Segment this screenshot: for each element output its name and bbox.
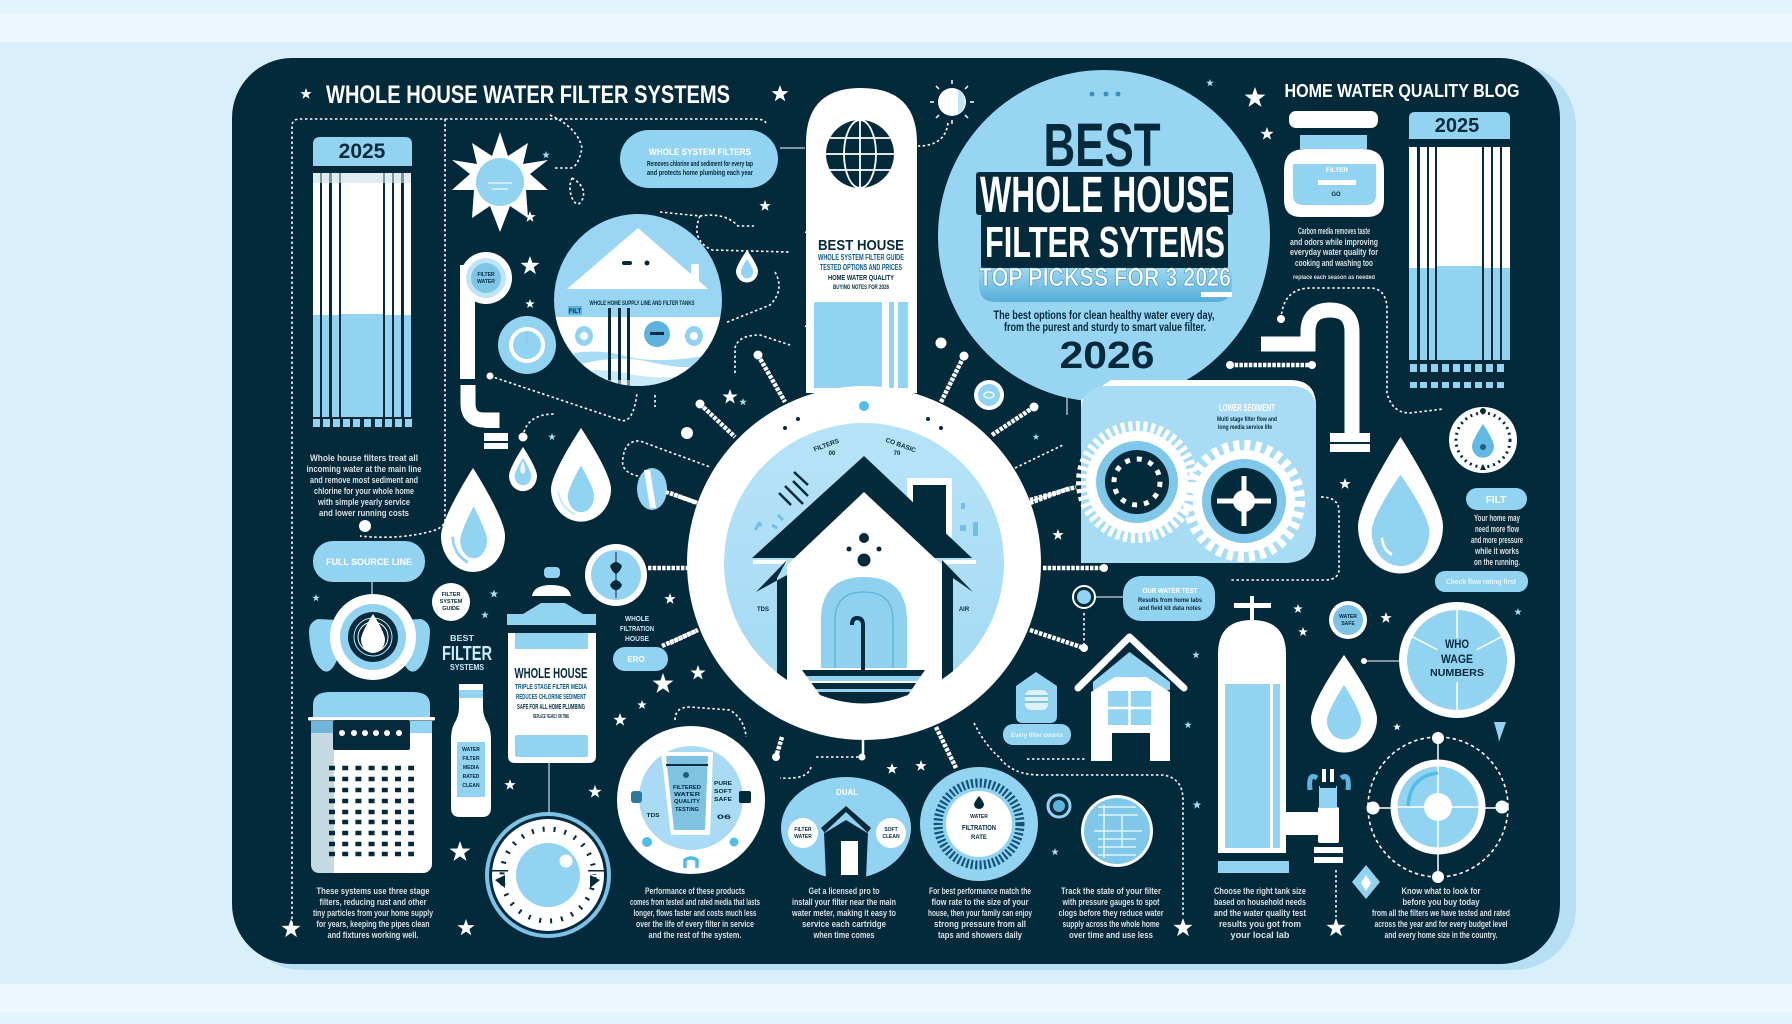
panel: main dark board <box>232 58 1576 970</box>
text block: tank: based on household needs <box>1214 897 1306 907</box>
text block: jar: everyday water quality for <box>1290 247 1378 257</box>
icon: small water drop <box>736 250 758 282</box>
title circle: WHOLE HOUSE <box>980 166 1230 223</box>
circle: ticked badge: RATE <box>971 835 987 841</box>
icon: small bottle: FILTER <box>462 756 480 762</box>
icon: faucet <box>1261 310 1370 452</box>
icon: small bottle <box>451 684 491 817</box>
pie badge: WAGE <box>1441 652 1473 666</box>
hub: central house emblem: TDS <box>757 607 769 613</box>
callout: water test pill: OUR WATER TEST <box>1142 586 1198 595</box>
text block: box <box>313 886 433 940</box>
text block: left cartridge: with simple yearly service <box>317 497 410 507</box>
title circle: from the purest and sturdy to smart value filter. <box>1004 320 1206 334</box>
dashed connectors <box>292 115 1443 929</box>
text block: target <box>1372 886 1510 940</box>
text block: left cartridge: and remove most sediment and <box>310 475 418 485</box>
text block: tank <box>1214 886 1306 940</box>
text block: target: and every home size in the country. <box>1384 930 1498 940</box>
callout: water test pill: Results from home labs <box>1138 598 1203 604</box>
side note right: need more flow <box>1475 524 1520 534</box>
icon: pipe with gauge <box>460 252 512 449</box>
label with pill beside hub: WHOLE <box>625 616 649 623</box>
text block: oval chart: Track the state of your filter <box>1061 886 1161 896</box>
icon: glass circle: QUALITY <box>674 799 700 805</box>
small badge near tank: WATER <box>1339 614 1357 620</box>
beaded spokes around hub <box>648 338 1316 768</box>
icon: glass circle: FILTERED <box>673 785 701 791</box>
icon: filter cartridge bottle: REDUCES CHLORINE SEDIMENT <box>516 694 586 701</box>
icon: glass circle: SAFE <box>714 797 732 803</box>
tall filter column with globe: BEST HOUSE <box>818 237 904 254</box>
icon: small house <box>1078 637 1184 761</box>
panel: gears: Multi stage filter flow and <box>1217 416 1277 423</box>
circle: small house: WATER <box>794 834 812 840</box>
text block: oval chart: clogs before they reduce water <box>1058 908 1164 918</box>
panel: gears <box>1081 380 1316 563</box>
text block: jar: Carbon media removes taste <box>1298 226 1370 236</box>
hub: central house emblem: AIR <box>959 607 970 613</box>
hub: central house emblem <box>687 386 1041 740</box>
text block: glass: comes from tested and rated media that lasts <box>630 897 760 907</box>
text block: target: across the year and for every budget level <box>1374 919 1508 929</box>
callout: water test pill <box>1073 576 1215 621</box>
text block: ticked badge: house, then your family can enjoy <box>928 908 1032 918</box>
icon: small bottle: WATER <box>462 747 480 753</box>
text block: box: and fixtures working well. <box>328 930 418 940</box>
callout pill: top: and protects home plumbing each year <box>647 170 753 177</box>
text block: house circle: when time comes <box>813 930 874 940</box>
text block: target: from all the filters we have tested and rated <box>1372 908 1510 918</box>
label: filter: FILTER <box>442 643 492 665</box>
icon: glass circle: TESTING <box>675 807 699 813</box>
icon: glass circle: WATER <box>674 792 700 798</box>
text block: target: Know what to look for <box>1402 886 1481 896</box>
left filter cartridge: 2025 <box>339 140 386 163</box>
icon: glass circle: PURE <box>714 781 732 787</box>
icon: dial <box>485 812 611 938</box>
text block: left cartridge: chlorine for your whole home <box>314 486 414 496</box>
icon: glass circle <box>617 726 765 874</box>
icon: large water drop right <box>1358 437 1443 574</box>
icon: filter cartridge bottle: TRIPLE STAGE FILTER MEDIA <box>515 684 587 691</box>
icon: jar: GO <box>1331 192 1341 198</box>
text block: left cartridge: and lower running costs <box>319 508 409 518</box>
circle: small house <box>781 777 911 879</box>
side note right: and more pressure <box>1471 535 1523 545</box>
panel: gears: LOWER SEDIMENT <box>1219 403 1275 414</box>
text block: jar: cooking and washing too <box>1295 258 1373 268</box>
heading: blog title: HOME WATER QUALITY BLOG <box>1284 81 1520 101</box>
small badge near tank: SAFE <box>1341 621 1355 627</box>
text block: left cartridge <box>306 453 422 518</box>
pie badge <box>1403 606 1511 714</box>
label with pill beside hub: HOUSE <box>625 636 649 643</box>
text block: tank: your local lab <box>1230 930 1290 940</box>
circle: small house: SOFT <box>884 827 898 833</box>
side note right: Your home may <box>1474 513 1520 523</box>
icon: capsule <box>637 468 698 510</box>
text block: jar: and odors while improving <box>1290 237 1378 247</box>
icon: small bottle tag <box>1003 672 1071 745</box>
text block: house circle: service each cartridge <box>802 919 886 929</box>
callout pill: top: WHOLE SYSTEM FILTERS <box>649 147 751 157</box>
icon: water drop left <box>441 468 505 572</box>
tall filter column with globe: TESTED OPTIONS AND PRICES <box>820 263 902 272</box>
icon: small bottle: MEDIA <box>463 765 479 771</box>
text block: tank: results you got from <box>1219 919 1301 929</box>
side note right: while it works <box>1474 546 1519 556</box>
text block: glass <box>630 886 760 940</box>
text block: house circle: Get a licensed pro to <box>808 886 880 896</box>
icon: target ring <box>1366 732 1508 883</box>
panel: house cross-section <box>550 214 730 392</box>
label: filter <box>442 634 492 672</box>
icon: water drop small <box>509 447 537 491</box>
pie badge: NUMBERS <box>1430 668 1484 679</box>
icon: drop dial device <box>309 594 430 680</box>
tall filter column with globe: WHOLE SYSTEM FILTER GUIDE <box>818 253 904 262</box>
icon: small ring <box>1048 795 1070 817</box>
text block: ticked badge: strong pressure from all <box>934 919 1026 929</box>
text block: glass: and the rest of the system. <box>648 930 742 940</box>
icon: round gauge <box>498 316 556 374</box>
side note right <box>1435 488 1528 592</box>
icon: water tank with valve <box>1218 596 1348 873</box>
label pill: left: FULL SOURCE LINE <box>326 557 412 568</box>
tall filter column with globe: BUYING NOTES FOR 2026 <box>833 285 889 291</box>
icon: jar: FILTER <box>1326 167 1348 174</box>
left filter cartridge <box>313 137 412 427</box>
icon: glass circle: TDS <box>646 813 660 819</box>
text block: jar <box>1290 226 1378 281</box>
text block: glass: over the life of every filter in service <box>636 919 754 929</box>
icon: small bottle tag: Every filter counts <box>1011 732 1063 739</box>
small badge: GUIDE <box>442 606 460 612</box>
text block: oval chart <box>1058 886 1164 940</box>
text block: left cartridge: incoming water at the main line <box>306 464 422 474</box>
text block: glass: Performance of these products <box>645 886 745 896</box>
circle: small house: DUAL <box>836 788 858 797</box>
text block: box: tiny particles from your home supply <box>313 908 433 918</box>
icon: small bottle: CLEAN <box>462 783 480 789</box>
title circle: TOP PICKSS FOR 3 2026 <box>979 262 1231 292</box>
text block: house circle <box>791 886 896 940</box>
right filter cartridge: 2025 <box>1435 115 1479 137</box>
text block: box: filters, reducing rust and other <box>320 897 427 907</box>
pie badge: WHO <box>1445 637 1469 651</box>
icon: oval chart <box>1079 793 1155 869</box>
icon: water drop medium <box>551 428 611 522</box>
title circle: 2026 <box>1060 335 1154 377</box>
icon: gauge right <box>1449 407 1517 473</box>
circle: ticked badge: FILTRATION <box>962 825 996 832</box>
stars <box>282 79 1522 937</box>
icon: glass circle: SOFT <box>714 789 733 795</box>
icon: small sun <box>930 80 974 124</box>
text block: left cartridge: Whole house filters treat all <box>310 453 418 463</box>
label with pill beside hub: FILTRATION <box>620 626 654 633</box>
panel: house cross-section: WHOLE HOME SUPPLY LINE AND FILTER TANKS <box>590 301 694 307</box>
text block: ticked badge: flow rate to the size of your <box>932 897 1029 907</box>
text block: ticked badge: For best performance match the <box>929 886 1031 896</box>
title circle: FILTER SYTEMS <box>985 218 1225 267</box>
icon: pipe with gauge: WATER <box>477 279 495 285</box>
small badge <box>432 583 470 621</box>
hub: central house emblem: 70 <box>894 451 901 457</box>
text block: house circle: water meter, making it easy to <box>791 908 896 918</box>
circle: small house: CLEAN <box>882 834 900 840</box>
icon: filter cartridge bottle <box>507 567 596 763</box>
icon: pipe with gauge: FILTER <box>477 272 495 278</box>
label: filter: BEST <box>450 634 474 643</box>
icon: jar <box>1284 111 1384 217</box>
hub: central house emblem: FILTERS <box>813 438 841 453</box>
text block: box: for years, keeping the pipes clean <box>316 919 430 929</box>
text block: tank: Choose the right tank size <box>1214 886 1306 896</box>
icon: water drop by tank <box>1311 655 1377 752</box>
icon: sun badge <box>452 132 548 232</box>
title circle <box>938 70 1270 402</box>
text block: glass: longer, flows faster and costs much less <box>634 908 756 918</box>
side note right: FILT <box>1486 495 1506 506</box>
text block: tank: and the water quality test <box>1214 908 1306 918</box>
title circle: BEST <box>1044 111 1160 179</box>
panel: house cross-section: FILT <box>569 309 581 315</box>
text block: ticked badge: taps and showers daily <box>938 930 1022 940</box>
icon: filter cartridge bottle: SAFE FOR ALL HOME PLUMBING <box>517 704 585 711</box>
circle: ticked badge: WATER <box>970 814 988 820</box>
tall filter column with globe <box>806 88 917 393</box>
text block: ticked badge <box>928 886 1032 940</box>
small badge: FILTER <box>442 592 460 598</box>
small badge: SYSTEM <box>440 599 463 605</box>
tall filter column with globe: HOME WATER QUALITY <box>828 275 894 282</box>
small badge near tank <box>1329 601 1367 639</box>
text block: box: These systems use three stage <box>316 886 430 896</box>
callout pill: top: Removes chlorine and sediment for every tap <box>647 161 753 168</box>
text block: house circle: install your filter near the main <box>792 897 896 907</box>
circle: ticked badge <box>920 767 1038 881</box>
callout: water test pill: and field kit data notes <box>1139 606 1202 612</box>
right filter cartridge <box>1409 112 1510 388</box>
icon: target ring left of hub <box>585 544 647 606</box>
label: filter: SYSTEMS <box>450 663 485 672</box>
side note right: Check flow rating first <box>1446 579 1517 586</box>
heading: left title: WHOLE HOUSE WATER FILTER SYSTEMS <box>326 81 730 109</box>
text block: oval chart: supply across the whole home <box>1062 919 1160 929</box>
circle: small house: FILTER <box>794 827 812 833</box>
icon: vent filter box <box>308 692 435 873</box>
text block: oval chart: over time and use less <box>1069 930 1153 940</box>
icon: filter cartridge bottle: WHOLE HOUSE <box>514 665 588 682</box>
side note right: on the running. <box>1474 557 1520 567</box>
small badge near hub top <box>974 380 1004 410</box>
callout pill: top <box>620 130 778 188</box>
icon: small bottle: RATED <box>463 774 480 780</box>
panel: gears: long media service life <box>1218 424 1272 431</box>
label pill: left <box>313 541 425 582</box>
label with pill beside hub: ERO <box>627 655 645 664</box>
title circle: The best options for clean healthy water every day, <box>994 308 1214 322</box>
icon: glass circle: 06 <box>717 815 732 821</box>
label with pill beside hub <box>613 616 668 671</box>
text block: target: before you buy today <box>1402 897 1480 907</box>
icon: filter cartridge bottle: REPLACE YEARLY ON TIME <box>533 714 569 720</box>
text block: oval chart: with pressure gauges to spot <box>1062 897 1160 907</box>
text block: jar: replace each season as needed <box>1293 275 1375 281</box>
hub: central house emblem: 00 <box>829 451 836 457</box>
hub: central house emblem: CO BASIC <box>884 437 917 454</box>
